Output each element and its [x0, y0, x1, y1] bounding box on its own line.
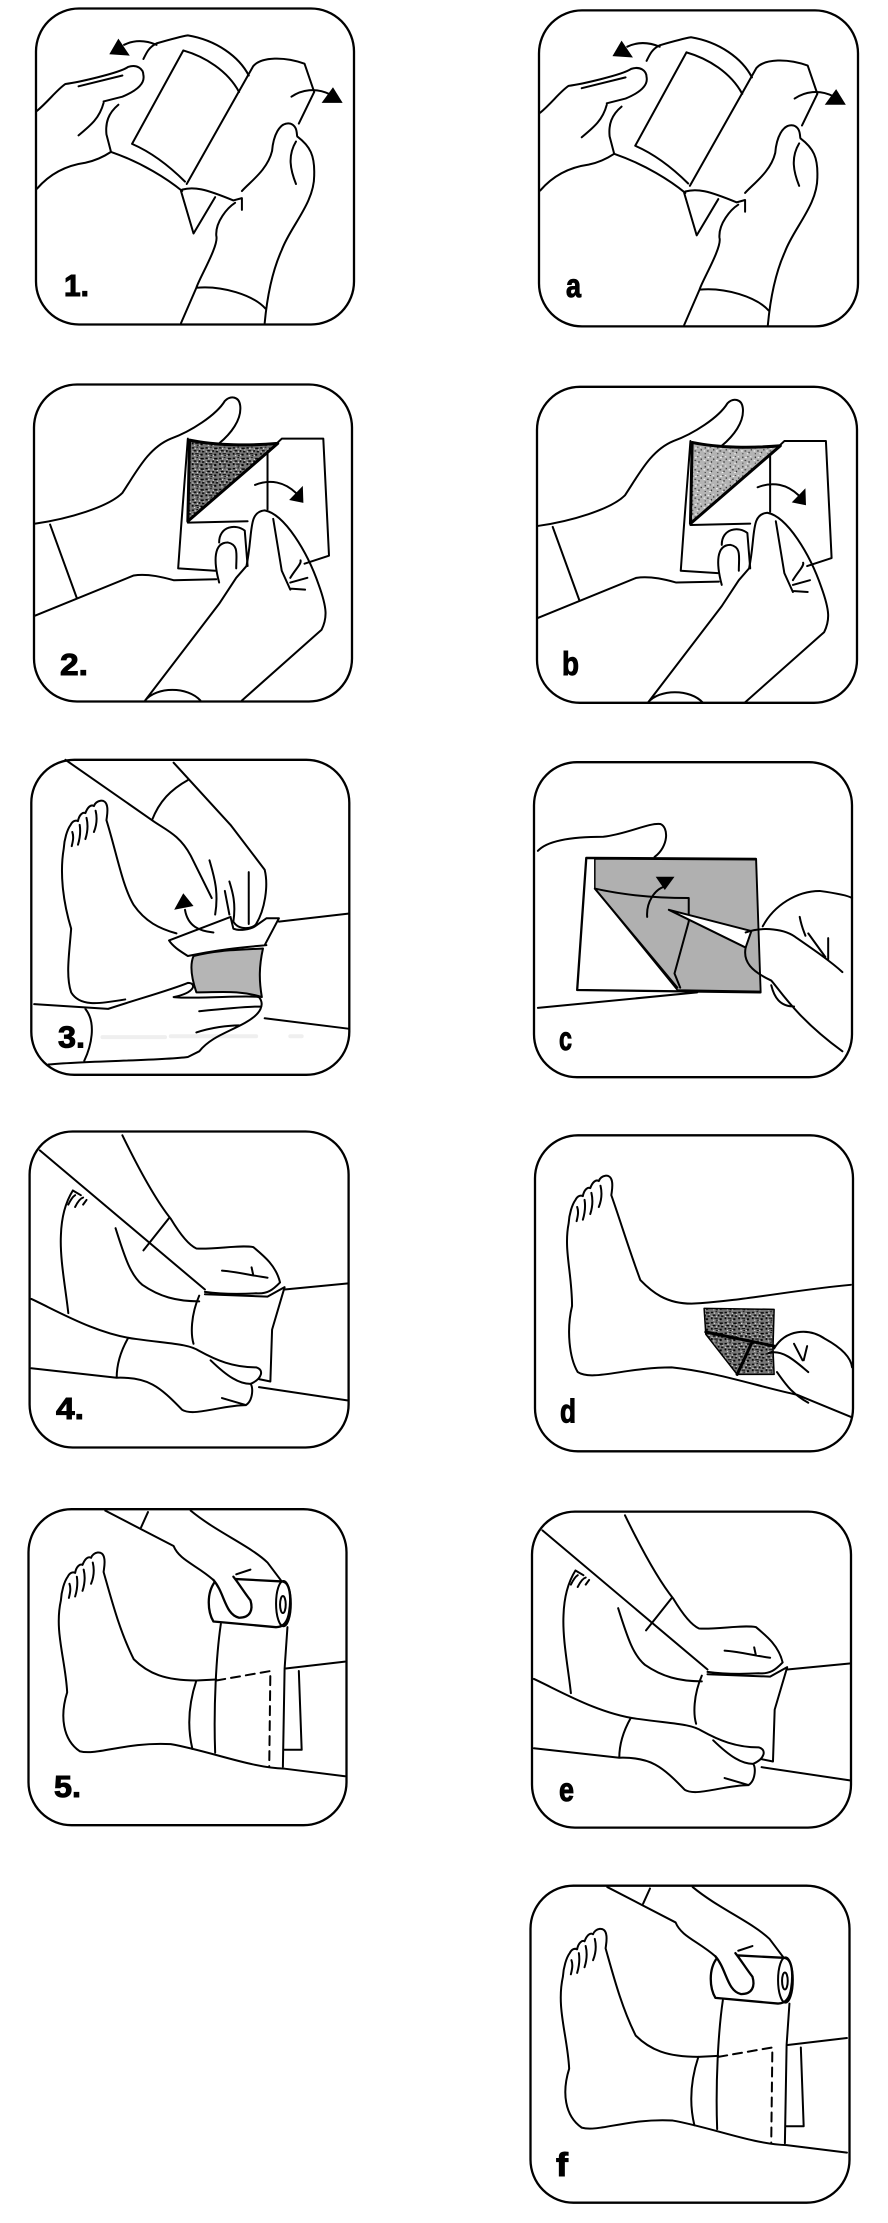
step label: 4.	[56, 1391, 84, 1426]
grey gel pad	[191, 948, 263, 997]
illustration: placing gel pad on ankle	[34, 760, 348, 1065]
panel: step e	[532, 1512, 851, 1828]
panel frame	[30, 1132, 349, 1448]
panel frame	[34, 384, 352, 702]
illustration: hands separating the dressing backing	[37, 35, 343, 323]
panel: step c	[534, 762, 852, 1077]
panel: step d	[535, 1135, 853, 1451]
bandage roll	[711, 1955, 793, 2004]
panel frame	[537, 387, 857, 703]
step label: f	[556, 2146, 569, 2183]
bandage roll	[209, 1579, 291, 1627]
arrow: peel left	[109, 39, 157, 56]
step label: e	[559, 1771, 574, 1808]
panel frame	[28, 1509, 346, 1825]
panel: step 4	[30, 1132, 349, 1448]
panel frame	[532, 1512, 851, 1828]
step label: 1.	[64, 268, 89, 303]
panel frame	[539, 10, 858, 326]
step label: c	[559, 1020, 572, 1057]
illustration: hands smoothing dressing around ankle	[31, 1135, 348, 1412]
illustration: peeling grey dressing with fingers	[538, 824, 852, 1051]
arrow: peel right	[795, 89, 846, 105]
panel: step b	[537, 387, 857, 703]
panel: step 2	[34, 384, 352, 702]
panel: step 3	[31, 760, 349, 1075]
dark speckled dressing surface	[188, 440, 278, 521]
panel: step f	[530, 1886, 850, 2203]
panel frame	[31, 760, 349, 1075]
step label: d	[560, 1392, 576, 1430]
illustration: peeling backing from light dressing	[538, 400, 832, 703]
dark speckled dressing	[704, 1308, 774, 1374]
panel frame	[534, 762, 852, 1077]
arrow: peel right	[291, 87, 343, 103]
arrow: lift flap	[174, 893, 213, 932]
step label: 5.	[54, 1769, 81, 1804]
illustration: peeling backing from dark dressing	[35, 397, 329, 700]
grey dressing surface	[595, 859, 760, 991]
illustration: wrapping bandage roll over ankle	[561, 1887, 847, 2153]
illustration: foot with dark dressing being applied	[567, 1176, 852, 1417]
step label: b	[562, 645, 579, 682]
arrow: lift up	[647, 877, 675, 917]
illustration: hands separating the dressing backing	[540, 37, 846, 325]
step label: 3.	[58, 1020, 85, 1054]
panel frame	[530, 1886, 850, 2203]
arrow: peel left	[612, 41, 660, 58]
step label: 2.	[60, 647, 88, 682]
panel: step 5	[28, 1509, 346, 1825]
illustration: hands smoothing dressing around ankle	[534, 1515, 851, 1792]
illustration: wrapping bandage roll over ankle	[59, 1511, 345, 1776]
panel frame	[535, 1135, 853, 1451]
panel: step a	[539, 10, 858, 326]
panel: step 1	[36, 8, 354, 324]
arrow: peel right	[255, 482, 303, 503]
arrow: peel right	[758, 484, 806, 505]
step label: a	[566, 267, 582, 304]
grey speckled dressing surface	[690, 442, 780, 524]
panel frame	[36, 8, 354, 324]
